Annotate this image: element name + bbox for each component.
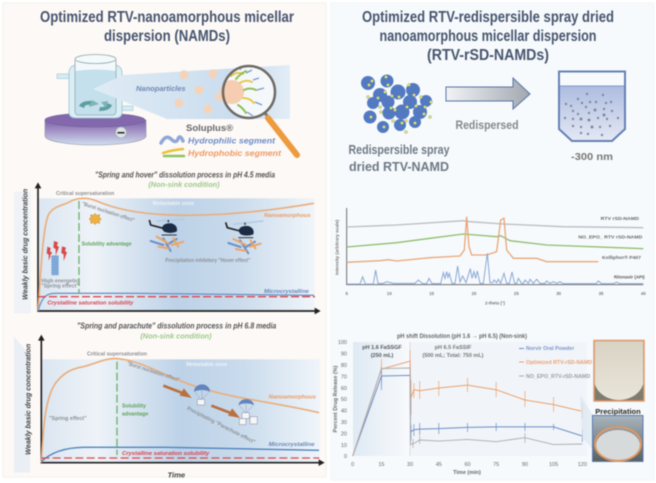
label: Kolliphor: Kolliphor® P407 [602, 254, 641, 261]
title: right: (RTV-rSD-NAMDs) [427, 47, 549, 64]
error bars [381, 350, 582, 419]
nanoparticles [174, 70, 224, 114]
label: solubility advantage: Solubility [122, 404, 146, 410]
x axis label: 2-theta (°) [485, 301, 506, 306]
label: spray dried NAMD [348, 143, 450, 174]
label: acid stage [362, 345, 402, 359]
x axis ticks: 90 [522, 462, 528, 468]
label: Ritonavir: Ritonavir (API) [614, 274, 645, 279]
solubility advantage arrow [115, 362, 119, 455]
arrowheads [35, 182, 321, 314]
label: spring effect: "Spring effect" [49, 416, 87, 422]
x axis ticks: 45 [436, 462, 442, 468]
y axis ticks: 90 [341, 352, 347, 358]
x ticks: 5 [345, 291, 348, 296]
label: crystalline solubility: Crystalline saturation solubility [47, 300, 134, 306]
chart heading: pH shift Dissolution (pH 1.6 → pH 6.5) (Non-sink) [397, 333, 527, 340]
y axis ticks: 100 [338, 340, 347, 346]
trace: Kolliphor P407 [347, 217, 598, 262]
x ticks: 25 [514, 291, 519, 296]
label: precipitation: Precipitation [595, 407, 641, 416]
phase divider [409, 342, 411, 456]
label: parachute effect: Precipitating "Parachute effect" [186, 406, 257, 446]
label: RTV-rSD-NAMD: RTV rSD-NAMD [601, 216, 639, 222]
panel: right background [331, 3, 654, 480]
icon: polymer cluster 1 [151, 237, 183, 251]
label: crystalline solubility: Crystalline saturation solubility [122, 451, 210, 457]
x ticks: 30 [556, 291, 562, 296]
icon: hydrophobic segment [163, 149, 184, 156]
y axis ticks: 0 [344, 454, 347, 460]
subheading: non-sink: (Non-sink condition) [140, 332, 212, 341]
label: spring effect 2: "Spring effect" [41, 284, 79, 290]
label: critical supersaturation: Critical supersaturation [56, 191, 114, 197]
label: solubility advantage: advantage [122, 411, 148, 417]
label: nanoparticles: Nanoparticles [136, 84, 186, 93]
line: optimized RTV-rSD-NAMD [353, 361, 582, 456]
icon: jacketed beaker with stirrer [57, 54, 133, 118]
label: NO_EPO: NO_EPO_ RTV rSD-NAMD [578, 234, 643, 240]
icon: burst [89, 213, 101, 225]
x axis ticks: 120 [578, 462, 587, 468]
label: particle size: -300 nm [571, 151, 613, 163]
label: nanoamorphous: Nanoamorphous [264, 213, 311, 219]
arrow: redispersed [446, 78, 530, 109]
curve: nanoamorphous [38, 198, 314, 311]
title: left: dispersion (NAMDs) [104, 28, 230, 45]
heading: spring and hover: "Spring and hover" dissolution process in pH 4.5 media [95, 170, 275, 180]
axes [38, 185, 317, 311]
line: crystalline solubility [38, 295, 315, 299]
icon: hydrophilic segment [161, 137, 183, 143]
icon: helicopter 1 [149, 219, 185, 235]
text: hydrophobic: Hydrophobic segment [188, 148, 282, 158]
line: crystalline solubility [41, 456, 319, 460]
icon: helicopter 2 [226, 221, 263, 238]
chart: spring and parachute [14, 321, 325, 479]
chart: XRD patterns [335, 208, 646, 306]
y axis label: Intensity (arbitrary scale) [335, 219, 340, 275]
arrowheads [38, 335, 325, 466]
label: intestinal stage [422, 345, 484, 359]
y axis label: Weakly basic drug concentration [23, 344, 32, 455]
y axis shade [14, 192, 31, 313]
heading: spring and parachute: "Spring and parachute" dissolution process in pH 6.8 media [77, 321, 276, 331]
y axis ticks: 30 [341, 420, 347, 426]
label: burst nucleation: "Burst nucleation effect" [81, 201, 136, 224]
x ticks: 15 [429, 291, 435, 296]
icon: magnifying glass with micelle [220, 66, 297, 155]
y axis [347, 208, 643, 285]
acid phase shade [353, 342, 410, 456]
label: critical supersaturation: Critical supersaturation [87, 351, 147, 357]
trace: Ritonavir [347, 253, 643, 284]
title: left: Optimized RTV-nanoamorphous micellar [40, 9, 294, 26]
label: redispersed: Redispersed [456, 120, 518, 132]
metastable zone [38, 198, 315, 311]
label: microcrystalline: Microcrystalline [264, 289, 309, 295]
x ticks: 20 [472, 291, 477, 296]
subheading: non-sink: (Non-sink condition) [148, 180, 220, 189]
curve: microcrystalline [38, 293, 314, 311]
legend [519, 346, 592, 380]
legend: NO_EPO_RTV-rSD-NAMD [526, 374, 590, 380]
y axis ticks: 20 [341, 432, 347, 438]
chart: spring and hover [14, 170, 321, 314]
arrow 1 [163, 386, 188, 396]
y axis shade [14, 337, 30, 473]
connector shade to photos [580, 395, 593, 450]
icon: polymer cluster 2 [228, 239, 261, 253]
x axis ticks: 75 [493, 462, 499, 468]
photo: precipitate [592, 416, 643, 462]
plot background [353, 342, 587, 456]
y axis ticks: 60 [341, 386, 347, 392]
trace: RTV-rSD-NAMD [347, 221, 643, 228]
x ticks: 40 [641, 291, 646, 296]
label: burst nucleation: "Burst nucleation effect" [126, 361, 181, 384]
chart: pH shift dissolution [333, 333, 592, 476]
label: metastable zone: Metastable zone [153, 201, 194, 207]
y axis ticks: 80 [341, 363, 347, 369]
legend: Norvir Oral Powder [526, 346, 574, 352]
x ticks: 35 [599, 291, 604, 296]
x axis ticks [351, 462, 587, 468]
label: solubility advantage: Solubility advantage [82, 241, 132, 247]
legend: Soluplus segments: Soluplus® [186, 123, 233, 134]
illustration: spray dried particles [361, 74, 432, 134]
title: right: nanoamorphous micellar dispersion [380, 28, 596, 45]
x axis ticks: 30 [407, 462, 413, 468]
x axis ticks: 0 [351, 462, 354, 468]
trace: NO_EPO [347, 234, 643, 249]
x axis ticks: 60 [464, 462, 471, 468]
label: time axis: Time [167, 470, 186, 479]
illustration: nanoparticle production with magnifier [45, 54, 297, 155]
label: acid stage: pH 1.6 FaSSGF [362, 345, 402, 351]
icon: parachute 1 [194, 384, 210, 405]
label: microcrystalline: Microcrystalline [269, 442, 315, 448]
metastable zone [41, 359, 320, 463]
label: metastable zone: Metastable zone [186, 362, 227, 368]
curve: nanoamorphous [41, 358, 319, 463]
y axis label: Weakly basic drug concentration [20, 189, 29, 300]
x axis ticks: 105 [549, 462, 558, 468]
solubility advantage arrow [77, 201, 81, 293]
label: hover effect: Precipitation inhibitory "Hover effect" [165, 258, 251, 264]
zoom cone [93, 65, 290, 119]
x ticks [345, 291, 646, 296]
line: Norvir Oral Powder [353, 375, 582, 456]
highlight: precipitate ring [595, 427, 641, 461]
label: spray dried NAMD: Redispersible spray [348, 143, 450, 157]
y axis ticks: 10 [341, 443, 347, 449]
x axis label: Time (min) [453, 470, 481, 476]
y axis label: Percent Drug Release (%) [333, 365, 339, 432]
y axis ticks [338, 340, 347, 460]
label: spring effect: High energetic [41, 278, 79, 284]
x axis ticks: 15 [378, 462, 384, 468]
panel: left background [3, 3, 326, 477]
icon: parachute 2 [238, 399, 257, 425]
y axis ticks: 70 [341, 374, 347, 380]
arrow 2 [211, 406, 237, 416]
label: intestinal stage: (500 mL; Total: 750 mL) [422, 353, 484, 359]
label: acid stage: (250 mL) [371, 353, 393, 359]
title: left [40, 9, 294, 45]
icon: hot plate [45, 113, 146, 145]
legend: Soluplus segments [161, 123, 282, 158]
line: NO_EPO [353, 368, 582, 456]
label: intestinal stage: pH 6.5 FaSSIF [435, 345, 472, 351]
legend: Optimized RTV-rSD-NAMD [526, 360, 592, 366]
label: spray dried NAMD: dried RTV-NAMD [349, 160, 449, 174]
axes [41, 338, 320, 463]
y axis ticks: 50 [341, 397, 347, 403]
icon: spring [51, 255, 59, 276]
text: hydrophilic: Hydrophilic segment [188, 136, 276, 146]
icon: lightning bolts [47, 241, 67, 261]
y axis ticks: 40 [341, 408, 347, 414]
x ticks: 10 [387, 291, 392, 296]
photo: clear dispersion [594, 340, 644, 401]
label: solubility advantage [122, 404, 148, 417]
label: nanoamorphous: Nanoamorphous [269, 394, 316, 400]
icon: beaker with dispersed particles [559, 72, 625, 141]
title: right [362, 9, 614, 64]
curve: microcrystalline [41, 447, 319, 462]
